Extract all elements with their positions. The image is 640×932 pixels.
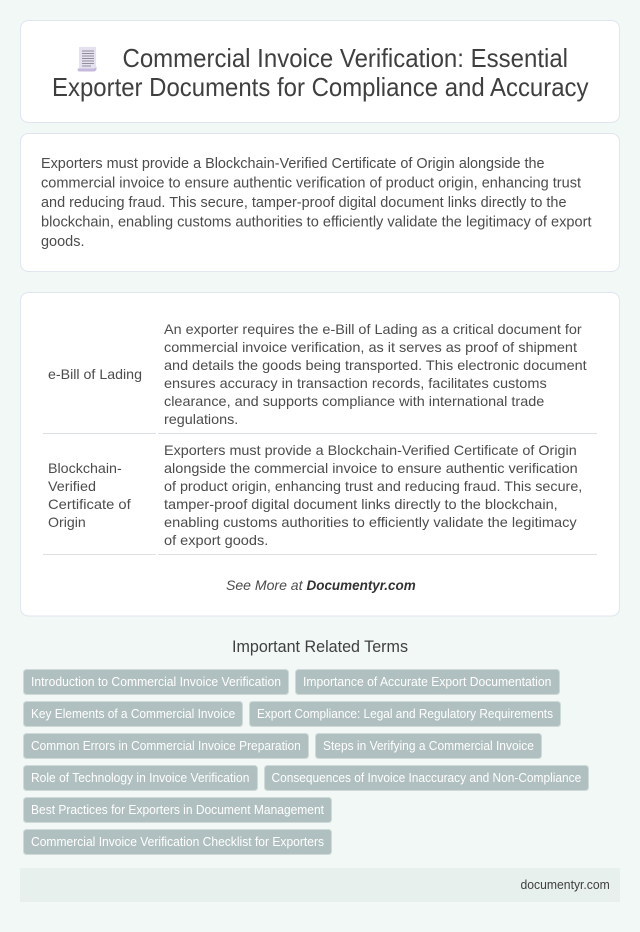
title: [52, 43, 588, 102]
see more link: See More at: [226, 577, 304, 593]
row: Blockchain-Verified Certificate of Origin: tamper-proof digital document links directly to the blockchain,: [164, 496, 558, 512]
summary text: and reducing fraud. This secure, tamper-proof digital document links directly to the: [41, 195, 566, 211]
row: Blockchain-Verified Certificate of Origin: Blockchain-: [48, 460, 122, 476]
summary text: blockchain, enabling customs authorities to efficiently validate the legitimacy of export: [41, 214, 592, 230]
footer bar: documentyr.com: [520, 877, 610, 892]
tag: Best Practices for Exporters in Document Management: [31, 803, 324, 817]
tag: Role of Technology in Invoice Verification: [31, 771, 249, 785]
tag: [24, 798, 332, 822]
summary text: commercial invoice to ensure authentic verification of product origin, enhancing trust: [41, 176, 581, 192]
title: Exporter Documents for Compliance and Accuracy: [52, 72, 588, 102]
tag: [264, 766, 588, 790]
tag: [316, 734, 542, 758]
row: Blockchain-Verified Certificate of Origin: enabling customs authorities to efficiently validate the legitimacy: [164, 514, 577, 530]
title: Commercial Invoice Verification: Essential: [122, 43, 568, 73]
tag: [24, 734, 308, 758]
row: Blockchain-Verified Certificate of Origin: alongside the commercial invoice to ensure authentic verification: [164, 460, 578, 476]
tag: [24, 766, 258, 790]
icon: invoice scroll: [78, 47, 96, 72]
tag: [24, 702, 242, 726]
heading: related terms: Important Related Terms: [232, 638, 408, 656]
row: Blockchain-Verified Certificate of Origin: Exporters must provide a Blockchain-Verified Certificate of Origin: [164, 442, 577, 458]
tag: [250, 702, 560, 726]
tag: Introduction to Commercial Invoice Verification: [31, 675, 281, 689]
see more link: Documentyr.com: [306, 577, 416, 593]
see more link: [226, 577, 416, 593]
row: e-Bill of Lading: ensures accuracy in transaction records, facilitates customs: [164, 375, 547, 391]
tag: Importance of Accurate Export Documentation: [303, 675, 551, 689]
row: e-Bill of Lading: An exporter requires the e-Bill of Lading as a critical document for: [164, 321, 582, 337]
summary text: goods.: [41, 234, 84, 250]
summary text: [41, 156, 592, 250]
panel: summary card: [20, 134, 620, 272]
tag: Commercial Invoice Verification Checklist for Exporters: [31, 835, 324, 849]
tag: Consequences of Invoice Inaccuracy and Non-Compliance: [272, 771, 581, 785]
row: Blockchain-Verified Certificate of Origin: Certificate of: [48, 496, 131, 512]
row: Blockchain-Verified Certificate of Origin: Verified: [48, 478, 96, 494]
row: e-Bill of Lading: commercial invoice verification, as it serves as proof of shipment: [164, 339, 577, 355]
row: e-Bill of Lading: e-Bill of Lading: [48, 366, 142, 382]
row: Blockchain-Verified Certificate of Origin: Origin: [48, 514, 86, 530]
row: e-Bill of Lading: and details the goods being transported. This electronic document: [164, 357, 587, 373]
summary text: Exporters must provide a Blockchain-Verified Certificate of Origin alongside the: [41, 156, 544, 172]
row: e-Bill of Lading: clearance, and supports compliance with international trade: [164, 393, 545, 409]
panel: documents table: [20, 292, 620, 616]
panel: title card: [20, 20, 620, 122]
tag: [296, 670, 560, 694]
tag: [24, 830, 332, 854]
tag: Key Elements of a Commercial Invoice: [31, 707, 235, 721]
footer bar: [20, 868, 620, 902]
tag: Steps in Verifying a Commercial Invoice: [323, 739, 534, 753]
tag: [24, 670, 288, 694]
row: Blockchain-Verified Certificate of Origin: of export goods.: [164, 532, 268, 548]
row: Blockchain-Verified Certificate of Origin: [43, 442, 597, 554]
related term tags: [24, 670, 588, 854]
row: e-Bill of Lading: regulations.: [164, 411, 238, 427]
tag: Export Compliance: Legal and Regulatory Requirements: [257, 707, 553, 721]
row: e-Bill of Lading: [43, 321, 597, 434]
row: Blockchain-Verified Certificate of Origin: of product origin, enhancing trust and reducing fraud. This secure,: [164, 478, 582, 494]
tag: Common Errors in Commercial Invoice Preparation: [31, 739, 301, 753]
